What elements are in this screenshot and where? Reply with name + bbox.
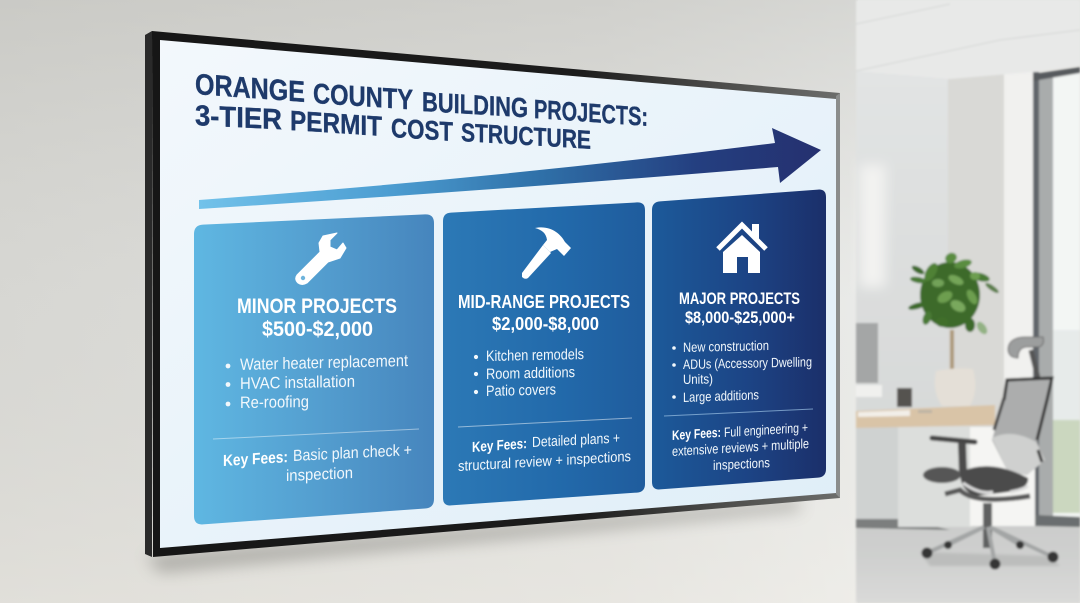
ceiling	[856, 0, 1080, 79]
list: mid-range projects: Kitchen remodels	[486, 346, 584, 365]
list: mid-range projects	[474, 346, 584, 400]
back wall middle	[948, 70, 1006, 430]
list: major projects: New construction	[683, 338, 769, 355]
floor	[856, 522, 1080, 603]
key fees: minor projects: inspection	[286, 465, 353, 485]
panel: mid-range projects	[443, 202, 645, 505]
panel: minor projects	[194, 214, 434, 524]
wall background	[0, 0, 858, 603]
title: ORANGE	[195, 68, 305, 109]
plant trunk	[950, 330, 954, 372]
heading: mid-range projects: $2,000-$8,000	[492, 313, 599, 334]
title: COST	[391, 113, 453, 147]
title: BUILDING	[422, 86, 528, 123]
key fees: minor projects: Basic plan check +	[293, 442, 412, 465]
window glass	[1052, 72, 1080, 517]
monitor	[856, 323, 878, 383]
list: major projects: ADUs (Accessory Dwelling	[683, 354, 812, 372]
frame right edge	[836, 93, 840, 498]
key fees: mid-range projects: Key Fees:	[472, 436, 527, 456]
list: major projects: Units)	[683, 371, 713, 387]
screen	[160, 40, 836, 548]
heading: minor projects: MINOR PROJECTS	[237, 295, 397, 318]
frame	[152, 31, 840, 557]
title: 3-TIER	[195, 100, 282, 136]
key fees: major projects: extensive reviews + multiple	[672, 436, 809, 459]
list: minor projects: Re-roofing	[240, 393, 309, 412]
office room background	[856, 0, 1080, 603]
list: mid-range projects: Patio covers	[486, 381, 556, 400]
key fees: major projects: Full engineering +	[724, 420, 808, 440]
list: minor projects: Water heater replacement	[240, 352, 408, 374]
chair	[922, 337, 1058, 570]
pencil cup	[897, 388, 912, 407]
list: minor projects	[226, 352, 408, 412]
heading: major projects: $8,000-$25,000+	[685, 308, 795, 327]
foliage	[908, 251, 1000, 336]
heading: mid-range projects: MID-RANGE PROJECTS	[458, 291, 630, 312]
icon: house	[718, 224, 766, 273]
back wall left	[856, 65, 949, 525]
heading: mid-range projects	[458, 291, 630, 334]
panel: major projects	[652, 190, 826, 489]
key fees: major projects	[672, 420, 809, 473]
frame left side	[145, 31, 152, 557]
heading: minor projects	[237, 295, 397, 341]
key fees: minor projects	[223, 442, 412, 485]
title: PROJECTS:	[534, 94, 648, 132]
baseboard	[856, 518, 950, 530]
wall mounted display	[145, 31, 840, 557]
key fees: mid-range projects: structural review + inspections	[458, 449, 631, 475]
planter	[935, 368, 975, 406]
heading: major projects	[679, 289, 800, 327]
growth arrow	[199, 128, 821, 209]
list: mid-range projects: Room additions	[486, 364, 575, 383]
list: major projects	[672, 338, 812, 405]
key fees: major projects: Key Fees:	[672, 425, 721, 443]
key fees: major projects: inspections	[713, 455, 770, 473]
title: STRUCTURE	[461, 117, 591, 155]
desk	[856, 405, 995, 428]
icon: wrench	[296, 233, 346, 284]
list: minor projects: HVAC installation	[240, 373, 355, 393]
white cabinet	[970, 427, 1035, 526]
title	[195, 68, 648, 155]
pillar	[1004, 70, 1034, 460]
window frame	[1033, 72, 1039, 517]
key fees: minor projects: Key Fees:	[223, 449, 288, 470]
frame shadow on wall	[146, 500, 800, 572]
heading: major projects: MAJOR PROJECTS	[679, 289, 800, 308]
heading: minor projects: $500-$2,000	[262, 318, 373, 341]
key fees: mid-range projects	[458, 431, 631, 475]
key fees: mid-range projects: Detailed plans +	[532, 431, 620, 451]
title: COUNTY	[313, 78, 413, 116]
cabinet	[898, 427, 972, 527]
title: PERMIT	[290, 105, 382, 142]
list: major projects: Large additions	[683, 387, 759, 405]
icon: hammer	[522, 227, 571, 279]
